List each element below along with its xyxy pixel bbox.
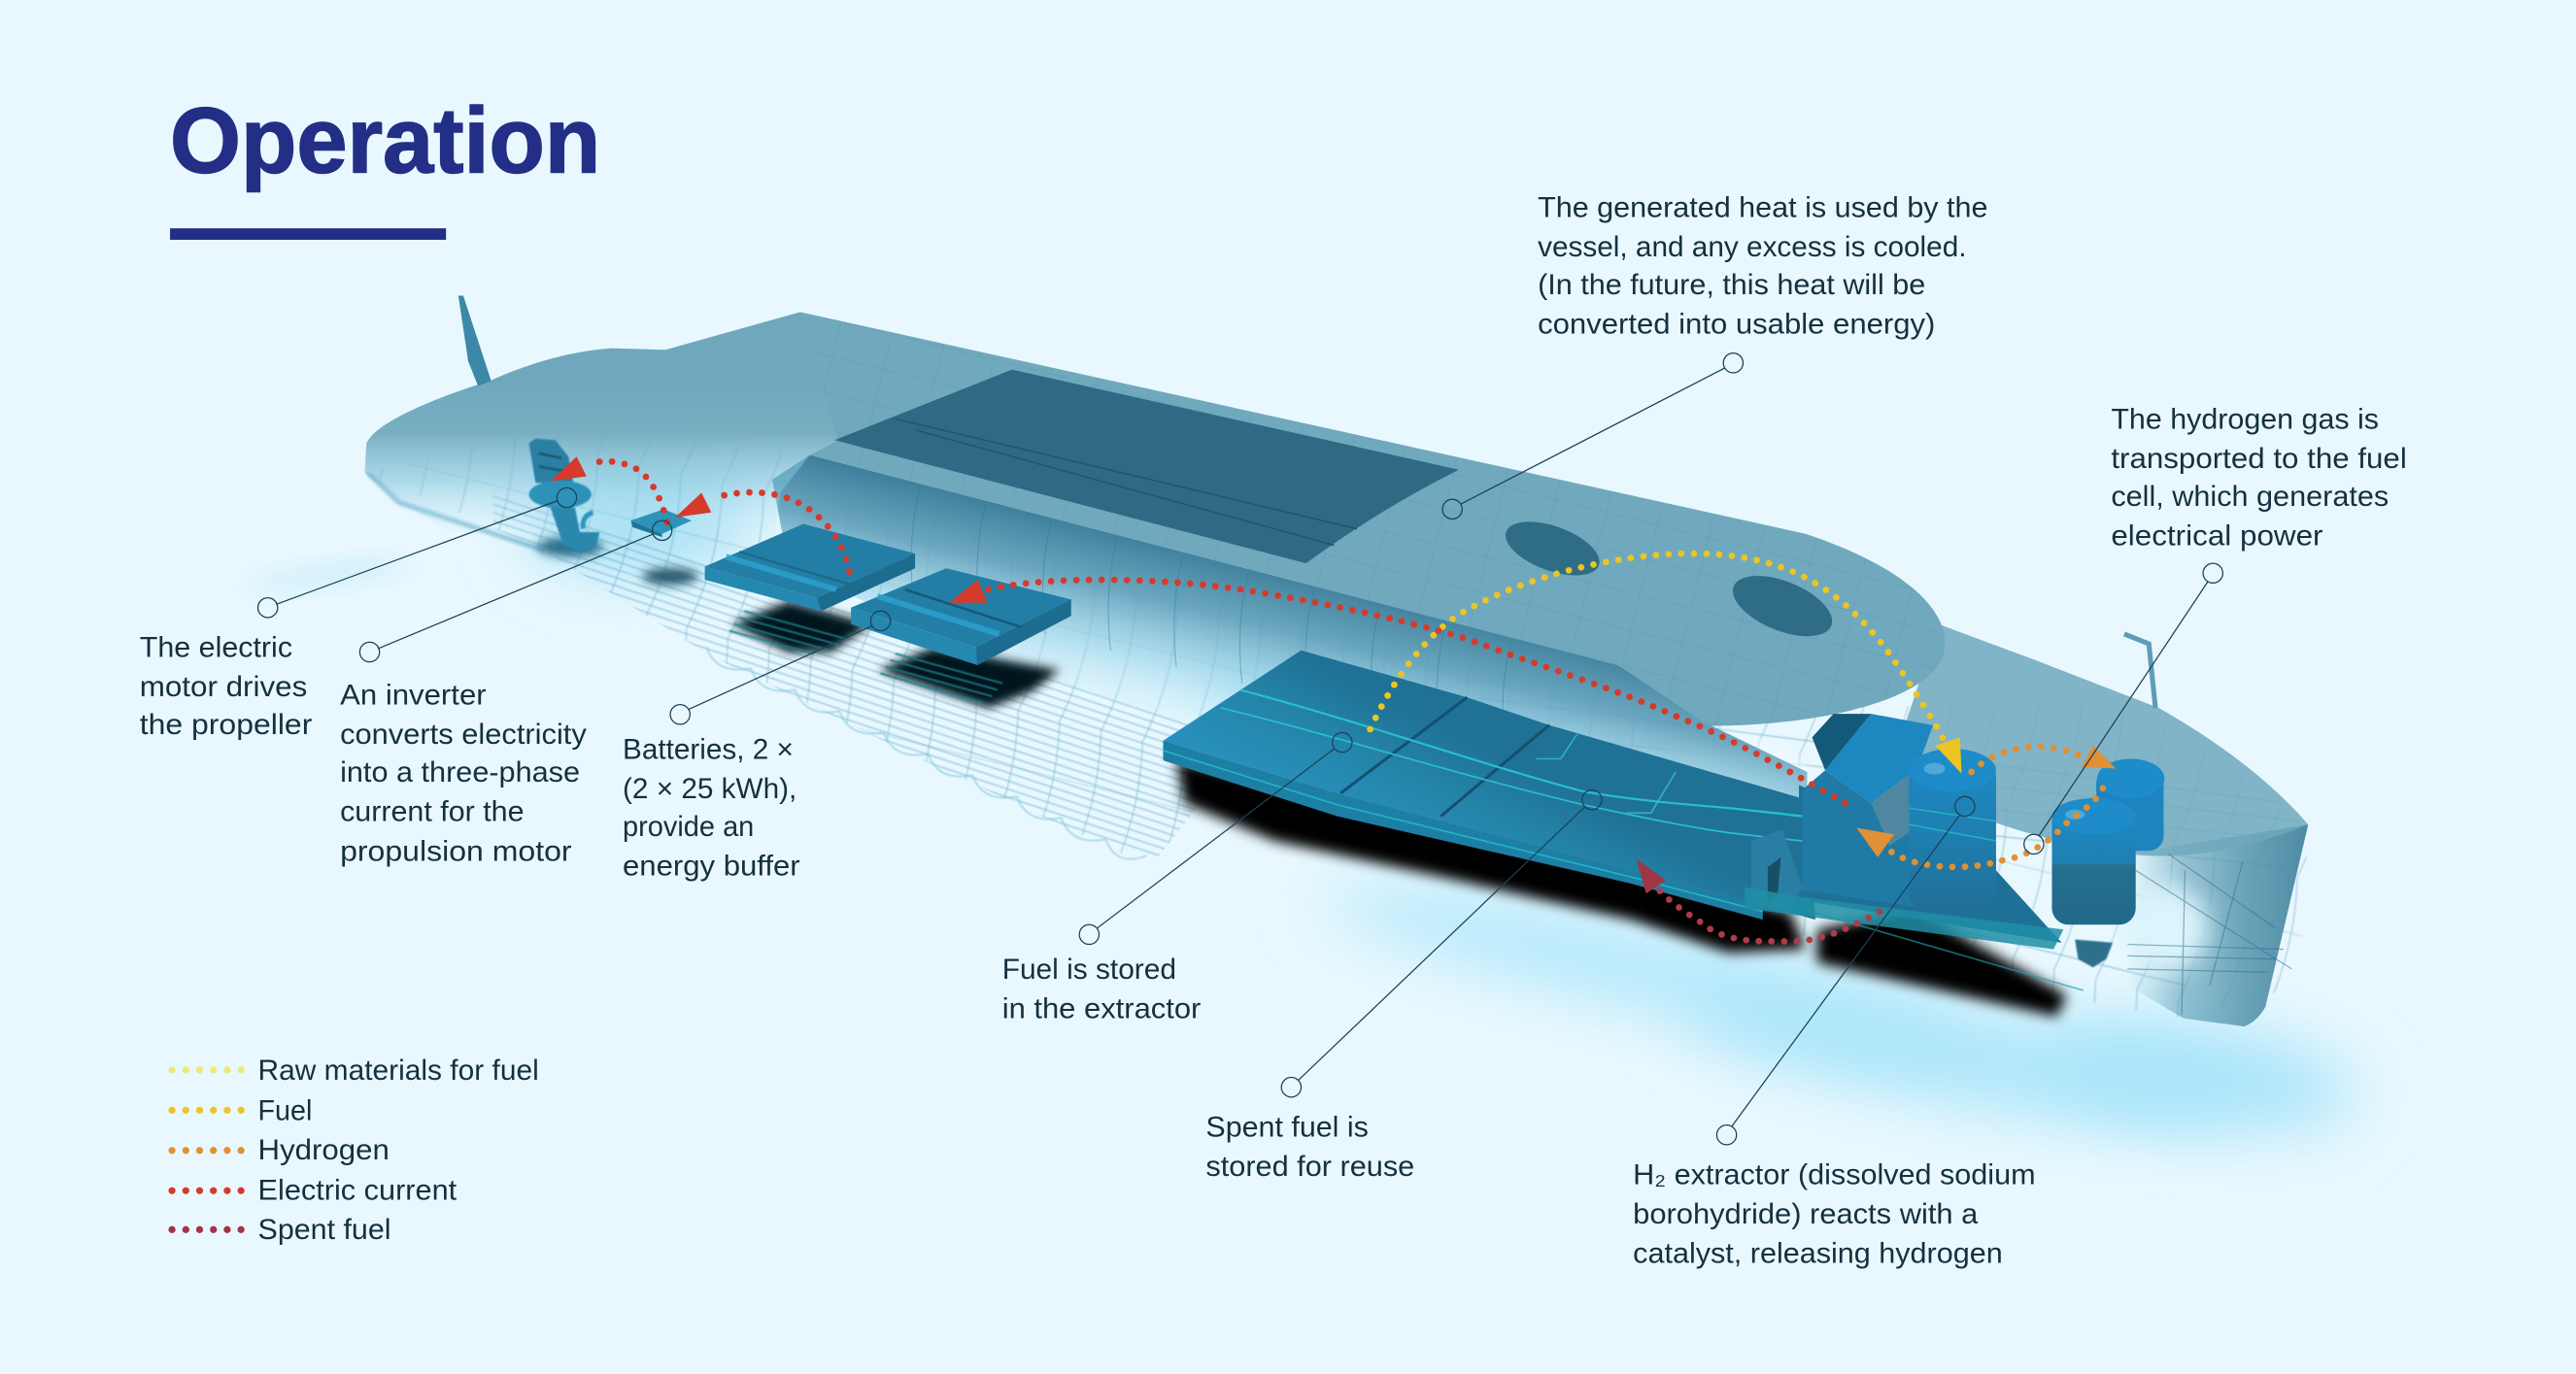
- deck hatch 2: [1724, 563, 1841, 649]
- legend: spent fuel: Spent fuel: [258, 1214, 391, 1246]
- hydrogen tank rear: [2096, 758, 2164, 851]
- scalloped hull keel arcs: [706, 647, 1147, 859]
- side bracket: [1751, 829, 1802, 912]
- text: batteries: provide an: [623, 811, 754, 843]
- legend: fuel: Fuel: [258, 1095, 312, 1127]
- text: spent fuel: [1205, 1111, 1414, 1183]
- text: inverter: An inverter: [340, 680, 487, 712]
- text: fuel cell: cell, which generates: [2111, 481, 2389, 513]
- text: heat: vessel, and any excess is cooled.: [1538, 231, 1967, 263]
- legend: raw materials: Raw materials for fuel: [258, 1055, 539, 1087]
- text: batteries: energy buffer: [623, 850, 800, 882]
- text: extractor: borohydride) reacts with a: [1633, 1198, 1979, 1230]
- bow hull light patch: [2122, 886, 2208, 971]
- title: Operation: [170, 90, 600, 193]
- hydrogen extractor body: [1802, 714, 1933, 907]
- text: heat: [1538, 191, 1988, 340]
- leader: inverter: [359, 520, 672, 662]
- bow mast: [2124, 634, 2155, 708]
- black shadows under components: [537, 537, 2067, 1017]
- text: extractor: [1633, 1158, 2036, 1270]
- stern deck: [364, 312, 936, 558]
- bow side hull: [2127, 824, 2308, 1026]
- deck grid lines: [800, 312, 1946, 726]
- electric current arrow: battery to inverter: [675, 492, 849, 572]
- battery pack 2: [851, 568, 1071, 665]
- leader: heat: [1442, 353, 1743, 519]
- text: fuel cell: [2111, 403, 2407, 553]
- side wall shading: [772, 455, 1807, 821]
- extractor cylinder: [1909, 749, 1996, 910]
- solar panels: [834, 370, 1459, 563]
- blue glow under ship: [246, 477, 2363, 1148]
- text: electric motor: [140, 632, 312, 741]
- text: inverter: current for the: [340, 796, 525, 828]
- text: spent fuel: Spent fuel is: [1205, 1111, 1369, 1143]
- stern mast: [458, 295, 491, 385]
- text: spent fuel: stored for reuse: [1205, 1151, 1414, 1183]
- text: inverter: into a three-phase: [340, 756, 580, 788]
- text: fuel cell: transported to the fuel: [2111, 443, 2407, 475]
- text: inverter: [340, 680, 587, 867]
- deck hatch 1: [1499, 511, 1607, 586]
- text: fuel store: Fuel is stored: [1002, 954, 1176, 986]
- text: fuel cell: The hydrogen gas is: [2111, 403, 2379, 435]
- hydrogen tank front: [2051, 798, 2136, 924]
- text: inverter: converts electricity: [340, 719, 587, 751]
- wall rib lines: [911, 486, 1511, 749]
- text: heat: (In the future, this heat will be: [1538, 269, 1925, 301]
- propulsion thruster: [2075, 939, 2113, 967]
- text: electric motor: the propeller: [140, 709, 312, 741]
- text: fuel store: [1002, 954, 1201, 1025]
- hull wireframe floor: [379, 452, 2306, 1018]
- text: extractor: H₂ extractor (dissolved sodium: [1633, 1158, 2036, 1190]
- bow hull lines: [2127, 855, 2291, 1015]
- leader: fuel store: [1079, 732, 1352, 945]
- legend: [172, 1055, 539, 1246]
- shadow line beyond tray: [1806, 910, 2084, 990]
- teal pipes over extractor: [1745, 887, 2063, 950]
- inverter: [630, 509, 692, 537]
- text: batteries: Batteries, 2 ×: [623, 733, 794, 765]
- superstructure deck: [800, 312, 1946, 726]
- text: fuel cell: electrical power: [2111, 520, 2323, 553]
- legend: hydrogen: Hydrogen: [258, 1134, 390, 1166]
- title underline: [170, 228, 446, 240]
- flow arrows: [551, 456, 2116, 942]
- electric current arrow: inverter to motor: [551, 456, 667, 522]
- text: batteries: [623, 733, 800, 882]
- text: inverter: propulsion motor: [340, 835, 572, 867]
- fuel flow arrow: [1371, 553, 1961, 774]
- text: electric motor: The electric: [140, 632, 292, 664]
- text: heat: converted into usable energy): [1538, 308, 1935, 340]
- leader: batteries: [670, 611, 891, 724]
- leader: fuel cell: [2024, 563, 2222, 855]
- stern hull edge: [368, 473, 544, 551]
- spent fuel arrow: [1637, 859, 1880, 942]
- text: extractor: catalyst, releasing hydrogen: [1633, 1238, 2003, 1270]
- leader: electric motor: [258, 487, 577, 618]
- text: batteries: (2 × 25 kWh),: [623, 773, 797, 805]
- text: electric motor: motor drives: [140, 671, 307, 703]
- leader: extractor: [1716, 796, 1975, 1145]
- leader lines: [258, 353, 2222, 1145]
- text: heat: The generated heat is used by the: [1538, 191, 1988, 223]
- hydrogen arrow back to extractor: [1856, 788, 2103, 867]
- electric motor: [529, 439, 599, 552]
- text: fuel store: in the extractor: [1002, 993, 1201, 1025]
- bright interior behind extractor: [1664, 722, 1818, 805]
- ship illustration: [246, 295, 2363, 1148]
- electric current arrow: extractor to battery: [950, 580, 1845, 803]
- hydrogen arrow to fuel cell: [1972, 746, 2116, 772]
- fuel tray: [1163, 651, 2062, 943]
- bow deck: [1889, 624, 2308, 856]
- legend: electric current: Electric current: [258, 1175, 458, 1207]
- battery pack 1: [705, 524, 915, 611]
- leader: spent fuel: [1281, 790, 1602, 1097]
